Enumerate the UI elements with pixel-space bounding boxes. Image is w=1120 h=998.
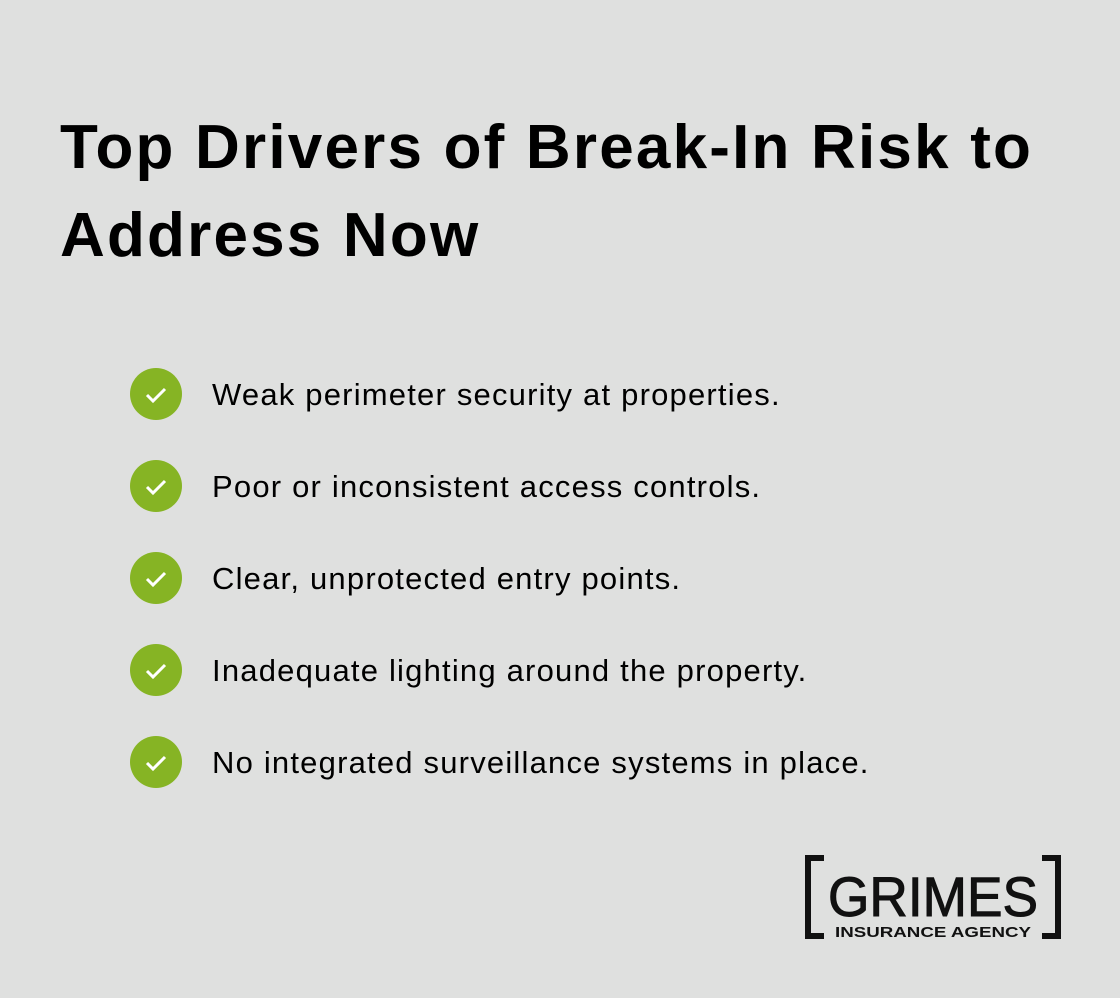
list item 3 (130, 552, 681, 604)
logo: GRIMES (828, 865, 1038, 928)
list item 1 (130, 368, 781, 420)
title: Address Now (60, 201, 480, 270)
logo: INSURANCE AGENCY (835, 924, 1031, 941)
list item 5: No integrated surveillance systems in place. (212, 745, 870, 780)
list item 2: Poor or inconsistent access controls. (212, 469, 761, 504)
list item 4 (130, 644, 808, 696)
list item 5 (130, 736, 870, 788)
title: Top Drivers of Break-In Risk to (60, 113, 1033, 182)
list item 1: Weak perimeter security at properties. (212, 377, 781, 412)
list item 2 (130, 460, 761, 512)
list item 4: Inadequate lighting around the property. (212, 653, 808, 688)
title (60, 113, 1033, 270)
list item 3: Clear, unprotected entry points. (212, 561, 681, 596)
logo (805, 855, 1061, 941)
